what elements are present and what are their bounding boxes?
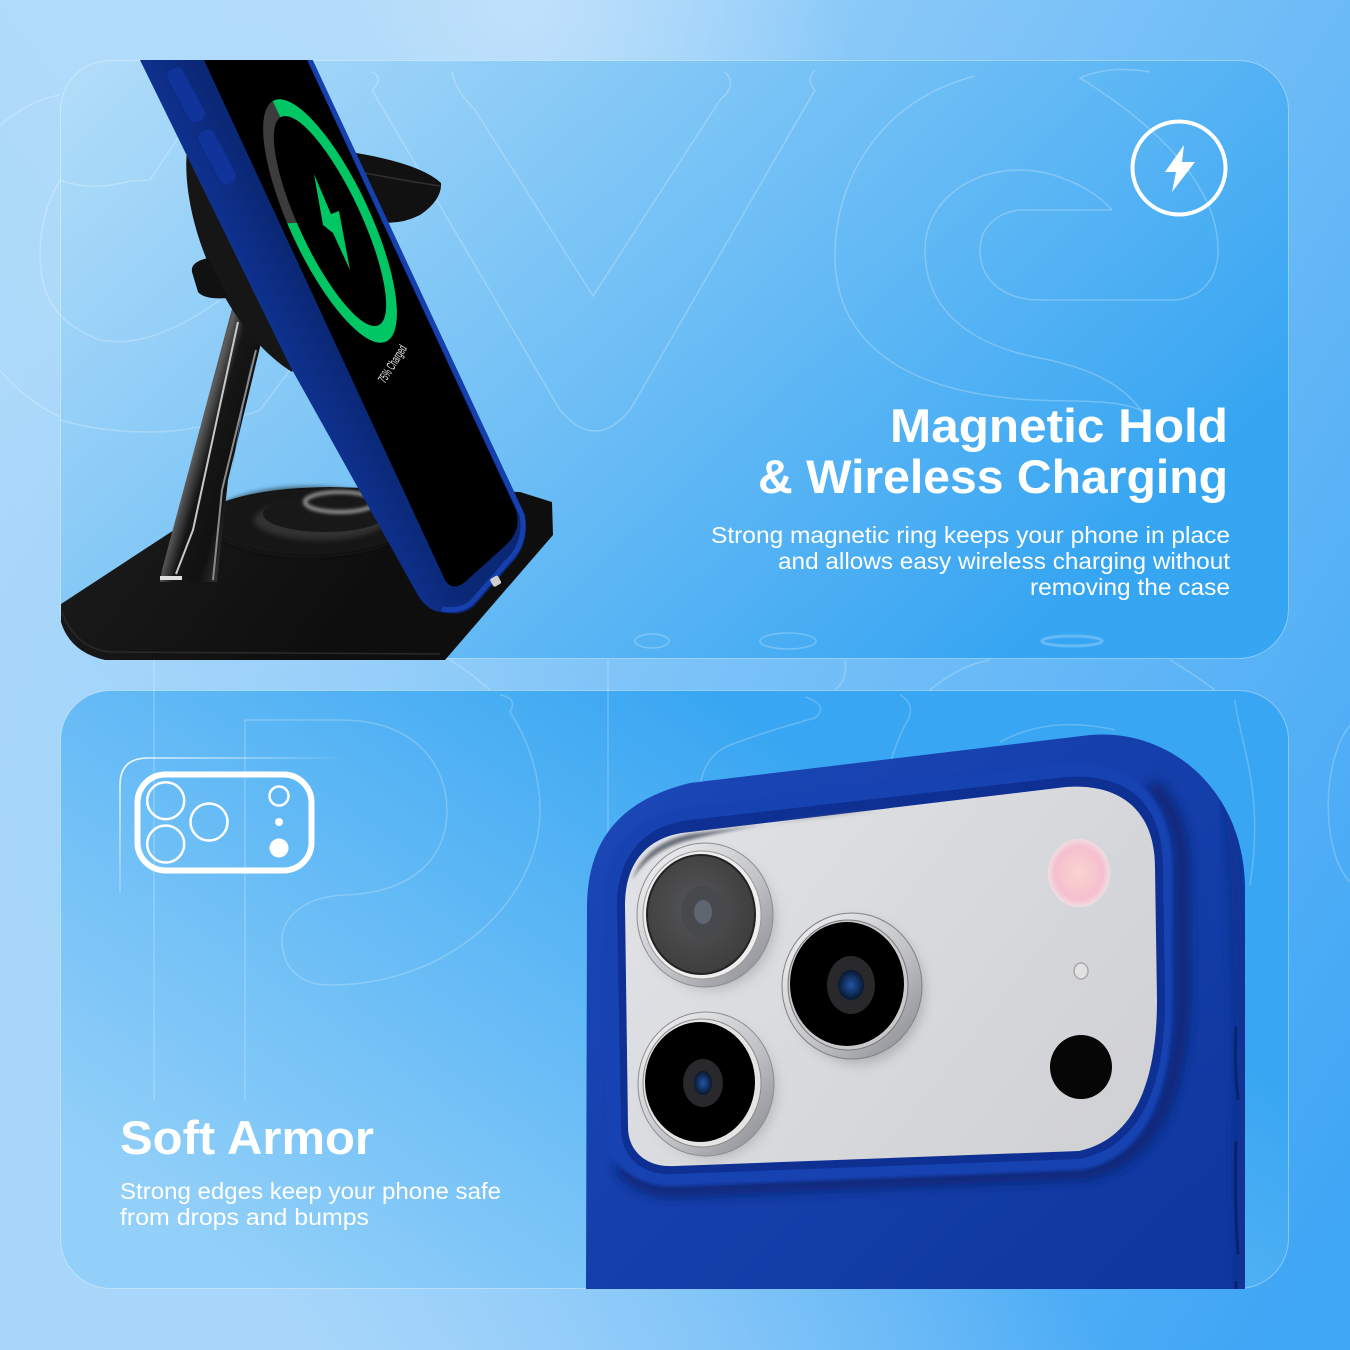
description: soft armor <box>120 1178 501 1230</box>
phone side buttons <box>168 68 236 184</box>
product photo: phone camera close-up <box>580 720 1260 1290</box>
description: magnetic hold <box>711 522 1230 600</box>
watermark letter outlines: top panel <box>0 70 1218 649</box>
panel background: bottom <box>60 690 1288 1288</box>
stand base <box>61 487 553 660</box>
heading: soft armor: Soft Armor <box>120 1111 374 1164</box>
camera cutout wall <box>617 777 1165 1174</box>
camera surround ring <box>604 764 1172 1186</box>
screen label: charge level: 75% Charged <box>375 342 410 386</box>
lens: top <box>637 843 776 990</box>
description: magnetic hold: Strong magnetic ring keeps your phone in place <box>711 522 1230 548</box>
charging ring <box>263 99 397 343</box>
heading: magnetic hold: & Wireless Charging <box>758 450 1228 503</box>
icon: camera module <box>120 758 350 893</box>
lens: bottom <box>638 1012 776 1158</box>
panel background: top <box>60 60 1288 658</box>
description: magnetic hold: removing the case <box>1030 574 1230 600</box>
phone screen <box>204 60 518 587</box>
flash <box>1048 839 1110 907</box>
panel: magnetic hold and wireless charging <box>0 60 1288 660</box>
case body <box>580 720 1260 1290</box>
microphone <box>1074 963 1088 979</box>
icon: lightning bolt in circle <box>1132 122 1226 214</box>
product photo: phone on magnetic stand <box>61 60 553 660</box>
lens: right <box>782 913 924 1064</box>
watermark letter outlines: bottom panel <box>154 660 1350 1100</box>
heading: magnetic hold: Magnetic Hold <box>890 399 1228 452</box>
description: magnetic hold: and allows easy wireless charging without <box>778 548 1230 574</box>
lidar sensor <box>1050 1035 1112 1099</box>
phone rim highlight <box>310 60 523 610</box>
panel: soft armor <box>60 660 1350 1290</box>
stand legs <box>160 305 261 582</box>
case shading <box>620 785 1242 1289</box>
magnetic mount disc <box>186 130 441 372</box>
heading: magnetic hold <box>758 399 1228 503</box>
phone case body <box>140 60 526 613</box>
plate shadow <box>632 810 880 880</box>
camera plate <box>625 787 1157 1166</box>
description: soft armor: Strong edges keep your phone safe <box>120 1178 501 1204</box>
description: soft armor: from drops and bumps <box>120 1204 369 1230</box>
side buttons <box>1235 1027 1238 1290</box>
port <box>490 576 502 587</box>
